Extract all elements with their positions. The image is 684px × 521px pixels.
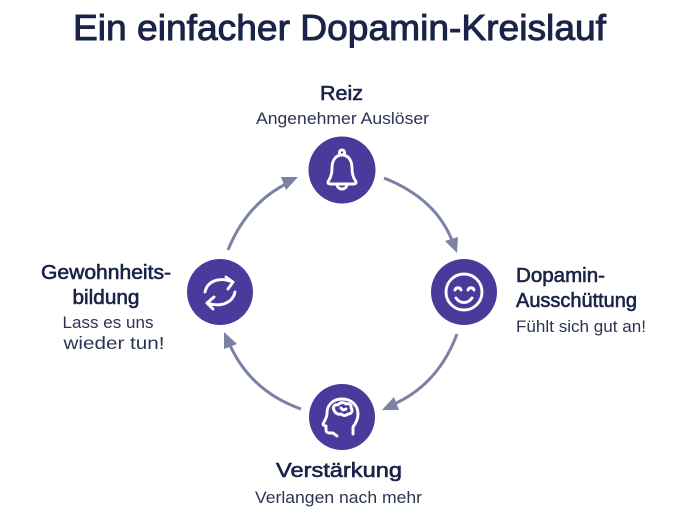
step: Gewohnheitsbildung	[41, 259, 253, 353]
text: Verlangen nach mehr: Verlangen nach mehr	[255, 489, 423, 507]
arrow: Dopamin-Ausschüttung to Verstärkung	[382, 334, 457, 410]
text: Angenehmer Auslöser: Angenehmer Auslöser	[256, 110, 430, 128]
step: Verstärkung	[255, 384, 423, 507]
heading: Reiz: Reiz	[320, 83, 363, 105]
icon: smiley	[431, 259, 497, 325]
text: Fühlt sich gut an!: Fühlt sich gut an!	[516, 318, 646, 336]
arrow: Gewohnheitsbildung to Reiz	[228, 177, 298, 250]
arrow: Reiz to Dopamin-Ausschüttung	[384, 178, 458, 253]
title: Ein einfacher Dopamin-Kreislauf	[73, 7, 607, 48]
heading: Dopamin-Ausschüttung: Dopamin-	[516, 265, 605, 287]
icon: cycle arrows	[187, 259, 253, 325]
text: Lass es uns wieder tun!: Lass es uns	[62, 314, 154, 332]
heading: Dopamin-Ausschüttung: Ausschüttung	[516, 290, 637, 312]
text: Lass es uns wieder tun!: wieder tun!	[62, 333, 164, 353]
heading: Gewohnheitsbildung: bildung	[72, 287, 140, 309]
heading: Verstärkung: Verstärkung	[276, 460, 402, 482]
step: Reiz	[256, 83, 430, 204]
heading: Gewohnheitsbildung: Gewohnheits-	[41, 262, 171, 284]
arrow: Verstärkung to Gewohnheitsbildung	[224, 332, 301, 409]
icon: bell	[308, 136, 376, 204]
step: Dopamin-Ausschüttung	[431, 259, 646, 336]
icon: head with brain	[309, 384, 375, 450]
